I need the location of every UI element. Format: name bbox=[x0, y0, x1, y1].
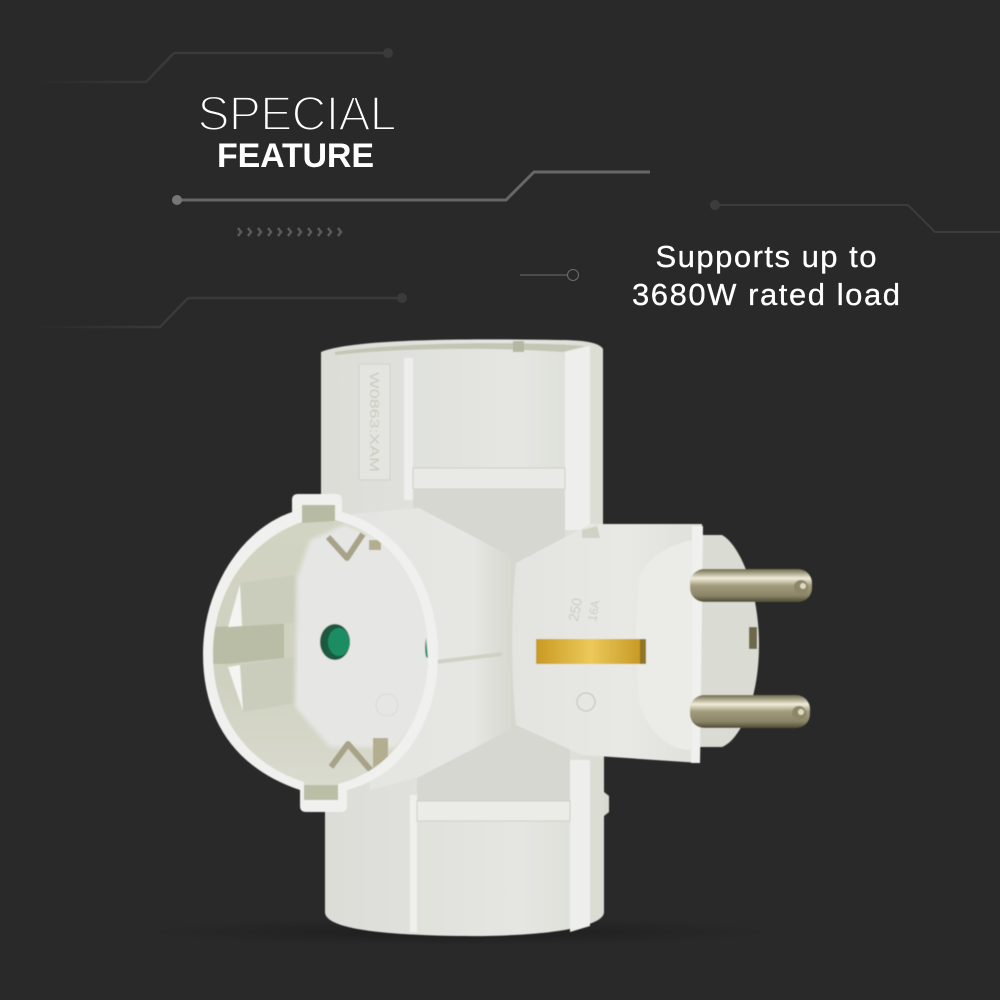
green indicator bbox=[320, 624, 350, 660]
inner socket face bbox=[295, 524, 440, 748]
title line: special: SPECIAL bbox=[198, 88, 396, 141]
right plug body: 16A bbox=[585, 599, 603, 623]
title bbox=[198, 88, 396, 175]
side contact ledges bbox=[242, 624, 280, 626]
left socket body bbox=[353, 508, 519, 790]
product: triple socket adapter bbox=[203, 339, 812, 936]
left socket face bbox=[203, 494, 440, 812]
plug rear disc bbox=[700, 535, 759, 747]
lower earth clip bbox=[373, 738, 388, 770]
socket rim and ears bbox=[203, 494, 438, 812]
ground shadow bbox=[150, 918, 770, 946]
socket interior bbox=[212, 504, 428, 800]
certification mark bbox=[577, 693, 595, 711]
callout text bbox=[632, 239, 900, 312]
upper pin bbox=[690, 569, 812, 602]
lower tube bbox=[325, 700, 609, 936]
earth contact slot bbox=[536, 639, 646, 664]
central channel bbox=[213, 623, 284, 664]
callout line 1: Supports up to bbox=[656, 239, 876, 274]
lower pin bbox=[690, 695, 810, 728]
circuit line: under title bbox=[172, 172, 650, 205]
engraved rating: 250 bbox=[565, 597, 585, 623]
engraved rating label bbox=[359, 364, 390, 480]
circuit line: top left bbox=[30, 48, 393, 82]
callout line 2: 3680W rated load bbox=[632, 277, 900, 312]
connector line to callout bbox=[520, 270, 578, 280]
chevron row bbox=[238, 228, 341, 236]
right plug body bbox=[512, 524, 759, 763]
upper earth clip bbox=[328, 534, 363, 558]
title line: feature: FEATURE bbox=[217, 137, 374, 175]
circuit line: lower left bbox=[40, 293, 407, 327]
circuit line: right bbox=[710, 200, 1000, 232]
upper tube bbox=[321, 339, 603, 610]
engraved rating label: W0863:XAM bbox=[367, 372, 382, 472]
